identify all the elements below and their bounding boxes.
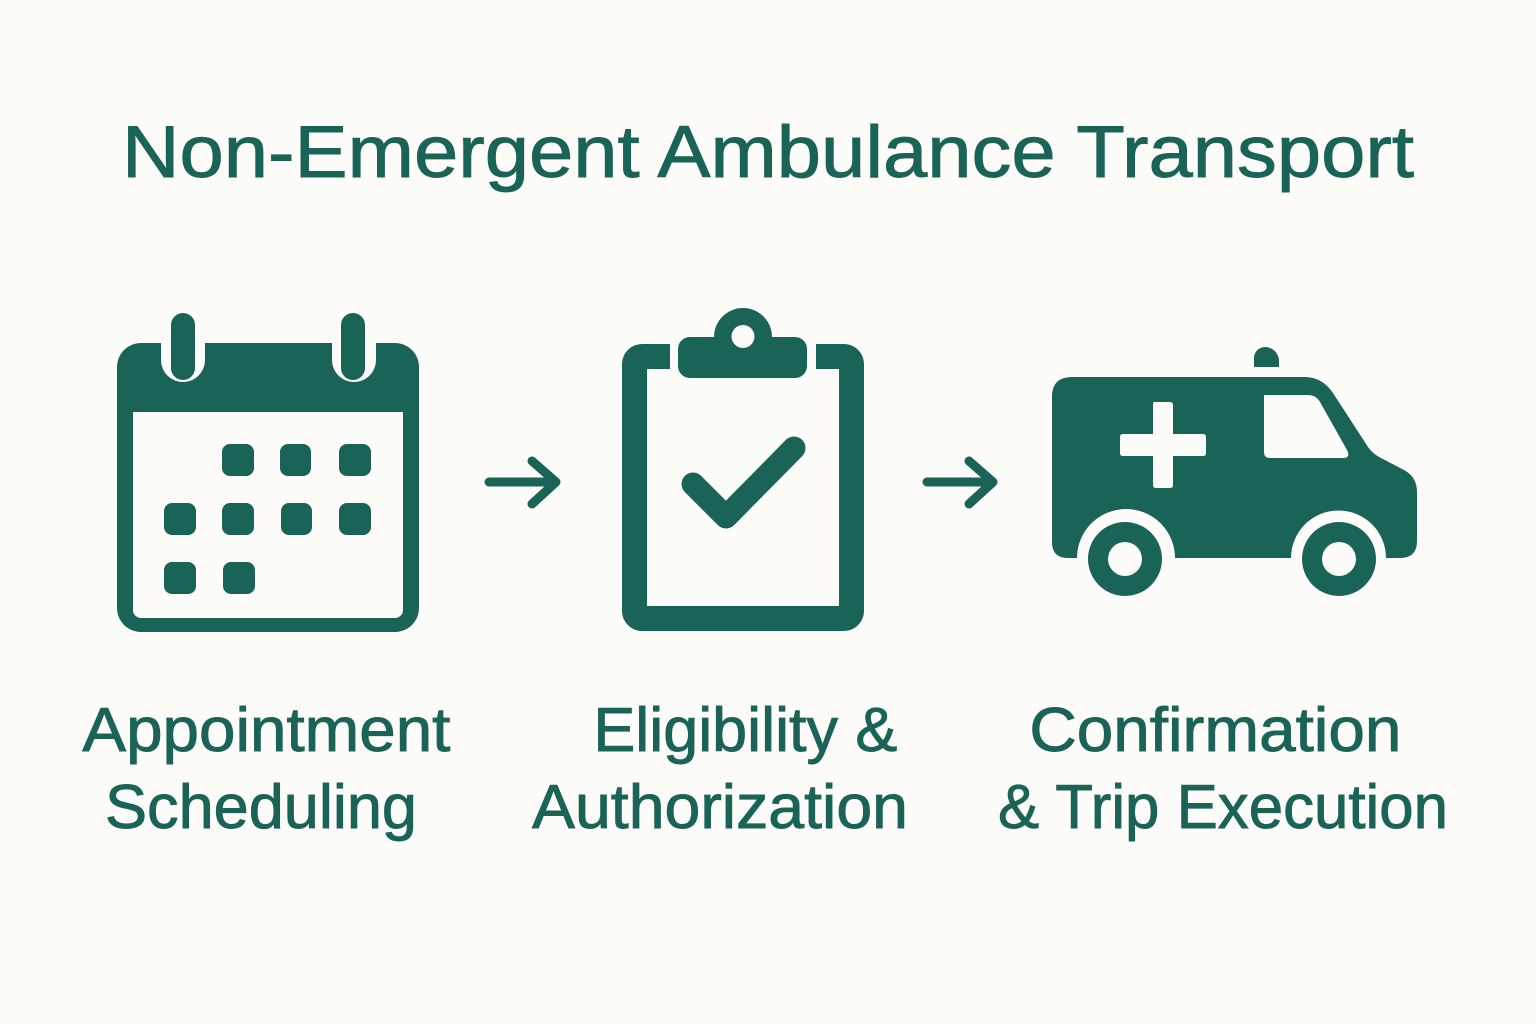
- icon: ambulance: [1052, 347, 1417, 596]
- title: Non-Emergent Ambulance Transport: [122, 112, 1414, 193]
- label: confirmation and trip execution: & Trip Execution: [998, 773, 1448, 842]
- arrow: step 2 to step 3: [927, 461, 993, 504]
- icon: calendar: [117, 313, 419, 632]
- icon: clipboard: [622, 308, 864, 631]
- label: confirmation and trip execution: Confirmation: [1029, 696, 1401, 765]
- label: eligibility and authorization: Eligibility &: [593, 696, 897, 765]
- arrow: step 1 to step 2: [489, 461, 556, 504]
- label: eligibility and authorization: Authorization: [532, 773, 908, 842]
- label: appointment scheduling: Appointment: [82, 696, 450, 765]
- label: appointment scheduling: Scheduling: [105, 773, 417, 842]
